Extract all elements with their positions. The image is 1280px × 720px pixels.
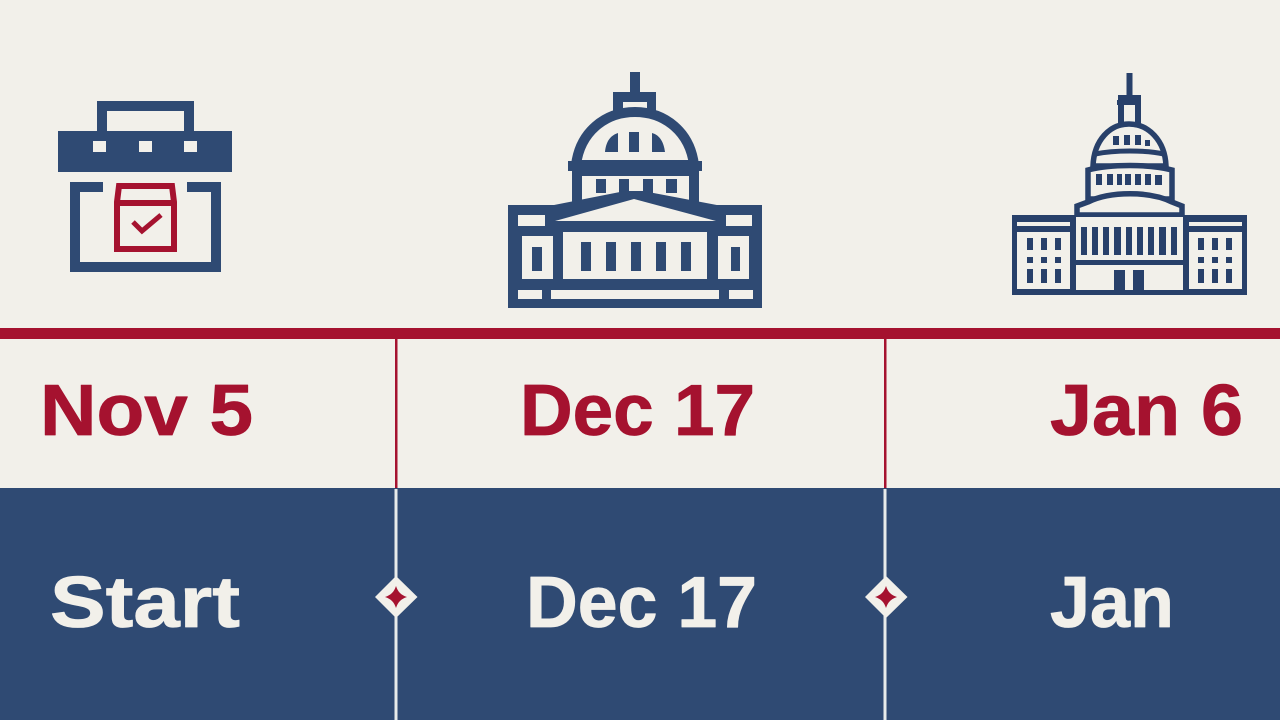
band dividers (394, 489, 886, 720)
marker: diamond right (865, 576, 908, 618)
label: Dec 17: Dec 17 (526, 563, 757, 643)
date: Dec 17: Dec 17 (520, 371, 755, 451)
date: Jan 6: Jan 6 (1050, 371, 1243, 451)
label: Jan: Jan (1050, 563, 1174, 643)
date column dividers (395, 339, 886, 489)
icon: ballot box with red check-marked ballot (58, 106, 232, 267)
marker: diamond left (375, 576, 418, 618)
label: Start: Start (50, 563, 240, 643)
timeline bar (0, 328, 1280, 339)
icon: capitol building with tall dome, right (1012, 73, 1247, 295)
icon: capitol building with dome, middle (508, 72, 762, 308)
navy label band (0, 488, 1280, 720)
date: Nov 5: Nov 5 (40, 371, 253, 451)
